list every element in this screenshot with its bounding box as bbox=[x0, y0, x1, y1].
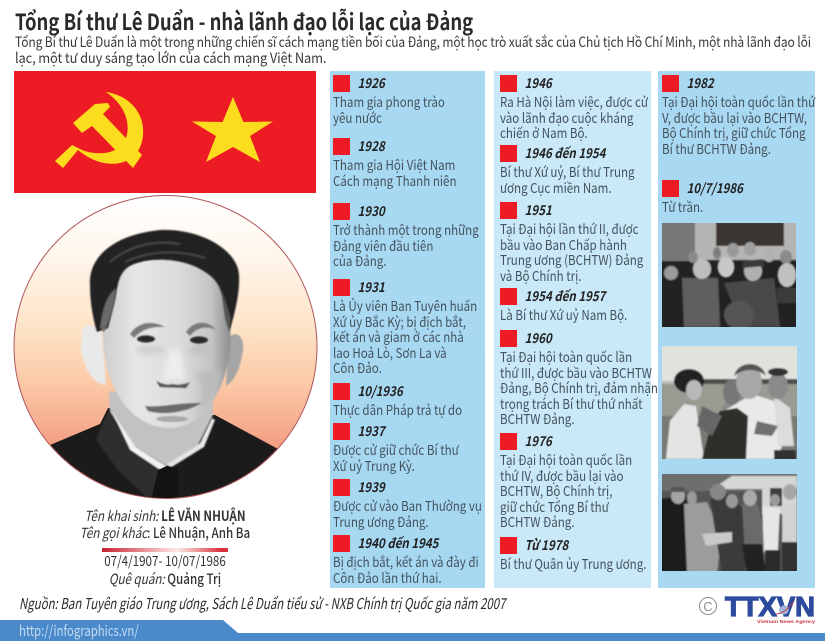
entry: 1946 to 1954: ương Cục miền Nam. bbox=[500, 177, 612, 197]
entry: 1951: bầu vào Ban Chấp hành bbox=[500, 234, 627, 254]
entry: 1976: 1976 bbox=[525, 430, 552, 450]
photo: crowd indoors bbox=[662, 223, 796, 327]
entry: from 1978: Từ 1978 bbox=[525, 534, 568, 554]
entry: 1946 to 1954: 1946 đến 1954 bbox=[525, 142, 605, 162]
entry: 1976: BCHTW, Bộ Chính trị, bbox=[500, 480, 612, 500]
entry: 1982: Tại Đại hội toàn quốc lần thứ bbox=[662, 91, 815, 111]
entry: 1926: yêu nước bbox=[333, 107, 382, 127]
entry: 1930: Trở thành một trong những bbox=[333, 219, 479, 239]
entry: 10/1936 bbox=[333, 380, 462, 419]
red divider bar bbox=[102, 548, 228, 552]
entry: 1976: giữ chức Tổng Bí thư bbox=[500, 496, 609, 516]
entry: 1928 bbox=[333, 135, 457, 190]
entry: 1951 bbox=[500, 199, 644, 285]
photo: man with rice sheaf bbox=[662, 346, 797, 459]
entry: 1954 to 1957: Là Bí thư Xứ uỷ Nam Bộ. bbox=[500, 304, 627, 324]
entry: 1982: V, được bầu lại vào BCHTW, bbox=[662, 107, 807, 127]
entry: 1951: 1951 bbox=[525, 199, 552, 219]
entry: 1931: 1931 bbox=[358, 276, 385, 296]
entry: 10/1936: 10/1936 bbox=[358, 380, 403, 400]
entry: 1951: và Bộ Chính trị. bbox=[500, 265, 581, 285]
entry: 1960 bbox=[500, 327, 658, 428]
entry: 1976: Tại Đại hội toàn quốc lần bbox=[500, 449, 632, 469]
panel: timeline column 3 bbox=[658, 71, 815, 588]
entry: 1930 bbox=[333, 200, 479, 270]
entry: 1982: Bí thư BCHTW Đảng. bbox=[662, 138, 771, 158]
entry: 1940 to 1945: 1940 đến 1945 bbox=[358, 532, 438, 552]
photo: group of people outdoors bbox=[662, 474, 797, 571]
entry: 1954 to 1957 bbox=[500, 285, 627, 324]
entry: 10/7/1986: Từ trần. bbox=[662, 196, 703, 216]
entry: 1930: 1930 bbox=[358, 200, 385, 220]
entry: 1926: Tham gia phong trào bbox=[333, 91, 445, 111]
entry: 1960: 1960 bbox=[525, 327, 552, 347]
entry: 1946 to 1954: Bí thư Xứ uỷ, Bí thư Trung bbox=[500, 161, 635, 181]
entry: 1937: 1937 bbox=[358, 420, 385, 440]
entry: 1982: Bộ Chính trị, giữ chức Tổng bbox=[662, 122, 806, 142]
entry: 1946: 1946 bbox=[525, 72, 552, 92]
entry: 1937 bbox=[333, 420, 459, 475]
entry: 1930: Đảng viên đầu tiên bbox=[333, 235, 433, 255]
source note: Nguồn: Ban Tuyên giáo Trung ương, Sách Lê Duẩn tiểu sử - NXB Chính trị Quốc gia năm 2007 bbox=[19, 593, 506, 614]
entry: 1982: 1982 bbox=[687, 72, 714, 92]
footer url: http://infographics.vn/ bbox=[19, 620, 139, 641]
intro text bbox=[15, 32, 811, 68]
entry: 1960: Tại Đại hội toàn quốc lần bbox=[500, 346, 632, 366]
intro text: Tổng Bí thư Lê Duẩn là một trong những chiến sĩ cách mạng tiền bối của Đảng, một học trò xuất sắc của Chủ tịch Hồ Chí Minh, một nhà lãnh đạo lỗi bbox=[15, 32, 811, 52]
birth name: Tên khai sinh: LÊ VĂN NHUẬN bbox=[84, 506, 246, 526]
entry: 1982 bbox=[662, 72, 816, 158]
entry: 1960: trọng trách Bí thư thứ nhất bbox=[500, 393, 642, 413]
entry: 1946: Ra Hà Nội làm việc, được cử bbox=[500, 91, 648, 111]
other names: Tên gọi khác: Lê Nhuận, Anh Ba bbox=[80, 523, 250, 543]
panel: timeline column 1 bbox=[330, 71, 485, 588]
flag: hammer and sickle with star bbox=[14, 71, 316, 193]
entry: 1946 bbox=[500, 72, 648, 142]
entry: 10/7/1986: 10/7/1986 bbox=[687, 177, 743, 197]
entry: 1930: của Đảng. bbox=[333, 250, 387, 270]
entry: 1939: Được cử vào Ban Thường vụ bbox=[333, 495, 482, 515]
entry: 1951: Trung ương (BCHTW) Đảng bbox=[500, 249, 643, 269]
dates: 07/4/1907- 10/07/1986 bbox=[104, 551, 226, 571]
entry: from 1978: Bí thư Quân ủy Trung ương. bbox=[500, 553, 646, 573]
entry: 1954 to 1957: 1954 đến 1957 bbox=[525, 285, 605, 305]
entry: from 1978 bbox=[500, 534, 646, 573]
footer band bbox=[0, 620, 825, 641]
entry: 1940 to 1945 bbox=[333, 532, 479, 587]
entry: 1960: BCHTW Đảng. bbox=[500, 408, 575, 428]
entry: 1931: kết án và giam ở các nhà bbox=[333, 326, 464, 346]
logo: TTXVN Vietnam News Agency: Vietnam News Agency bbox=[757, 619, 815, 624]
entry: 1951: Tại Đại hội lần thứ II, được bbox=[500, 218, 639, 238]
entry: 1946 to 1954 bbox=[500, 142, 635, 197]
entry: 1926: 1926 bbox=[358, 72, 385, 92]
entry: 1960: Đảng, Bộ Chính trị, đảm nhận bbox=[500, 377, 658, 397]
entry: 1939 bbox=[333, 476, 482, 531]
intro text: lạc, một tư duy sáng tạo lớn của cách mạng Việt Nam. bbox=[15, 48, 326, 68]
entry: 1946: vào lãnh đạo cuộc kháng bbox=[500, 107, 633, 127]
entry: 1931: Là Ủy viên Ban Tuyên huấn bbox=[333, 295, 477, 315]
entry: 1939: Trung ương Đảng. bbox=[333, 511, 429, 531]
entry: 1976 bbox=[500, 430, 632, 531]
entry: 10/7/1986 bbox=[662, 177, 744, 216]
entry: 1940 to 1945: Bị địch bắt, kết án và đày đi bbox=[333, 551, 479, 571]
entry: 1931: lao Hoả Lò, Sơn La và bbox=[333, 342, 447, 362]
entry: 1928: Cách mạng Thanh niên bbox=[333, 170, 457, 190]
panel: timeline column 2 bbox=[494, 71, 651, 588]
hometown: Quê quán: Quảng Trị bbox=[109, 569, 221, 589]
entry: 10/1936: Thực dân Pháp trả tự do bbox=[333, 399, 462, 419]
entry: 1940 to 1945: Côn Đảo lần thứ hai. bbox=[333, 567, 442, 587]
entry: 1976: thứ IV, được bầu lại vào bbox=[500, 465, 624, 485]
entry: 1931: Xứ ủy Bắc Kỳ; bị địch bắt, bbox=[333, 311, 466, 331]
entry: 1928: Tham gia Hội Việt Nam bbox=[333, 154, 455, 174]
entry: 1937: Được cử giữ chức Bí thư bbox=[333, 439, 459, 459]
entry: 1928: 1928 bbox=[358, 135, 385, 155]
entry: 1931 bbox=[333, 276, 477, 377]
entry: 1976: BCHTW Đảng. bbox=[500, 511, 575, 531]
entry: 1926 bbox=[333, 72, 445, 127]
portrait in circle bbox=[14, 195, 318, 499]
entry: 1937: Xứ uỷ Trung Kỳ. bbox=[333, 455, 415, 475]
entry: 1939: 1939 bbox=[358, 476, 385, 496]
title: Tổng Bí thư Lê Duẩn - nhà lãnh đạo lỗi lạc của Đảng bbox=[15, 5, 473, 37]
entry: 1960: thứ III, được bầu vào BCHTW bbox=[500, 362, 652, 382]
entry: 1946: chiến ở Nam Bộ. bbox=[500, 122, 588, 142]
entry: 1931: Côn Đảo. bbox=[333, 357, 382, 377]
logo: TTXVN Vietnam News Agency: C bbox=[703, 599, 713, 614]
